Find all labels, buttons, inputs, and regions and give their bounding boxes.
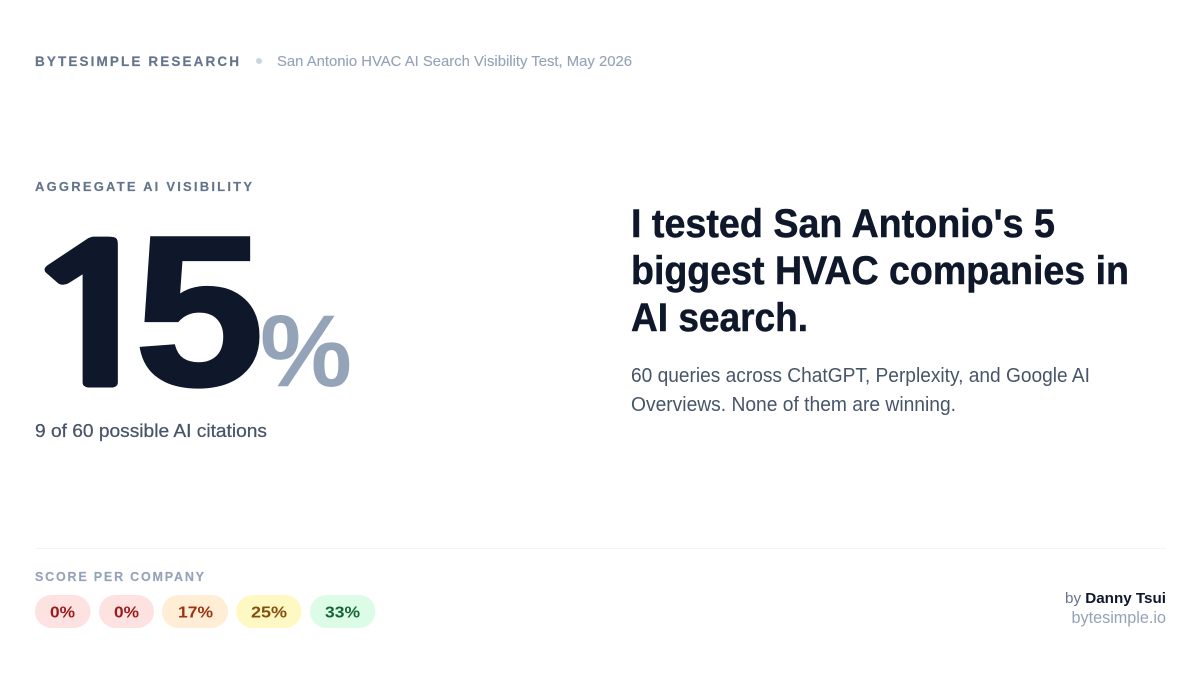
pill: 0% second xyxy=(99,595,154,628)
byline xyxy=(1065,590,1166,627)
pill: 25%: 25% xyxy=(251,604,287,622)
headline: biggest HVAC companies in xyxy=(631,249,1129,293)
description xyxy=(631,365,1090,416)
percent sign: % xyxy=(260,294,352,408)
big number xyxy=(14,191,264,431)
report subtitle: San Antonio HVAC AI Search Visibility Test, May 2026 xyxy=(277,54,632,70)
brand label: BYTESIMPLE RESEARCH xyxy=(35,54,239,69)
pill: 0% second: 0% xyxy=(114,604,139,622)
pill: 17%: 17% xyxy=(178,604,213,622)
header row xyxy=(35,54,632,70)
pill: 0% xyxy=(35,595,90,628)
description: 60 queries across ChatGPT, Perplexity, and Google AI xyxy=(631,365,1090,387)
panel: aggregate stat xyxy=(14,179,352,441)
site: bytesimple.io xyxy=(1072,609,1166,627)
big number: 1 xyxy=(14,224,175,414)
pill: 17% xyxy=(162,595,228,628)
headline: I tested San Antonio's 5 xyxy=(631,202,1055,246)
citations caption: 9 of 60 possible AI citations xyxy=(35,420,267,441)
pill: 0%: 0% xyxy=(50,604,75,622)
author: by Danny Tsui xyxy=(1065,590,1166,607)
headline xyxy=(631,202,1129,340)
section label: SCORE PER COMPANY xyxy=(35,570,205,584)
headline: AI search. xyxy=(631,296,808,340)
pill: 33% xyxy=(310,595,376,628)
panel: score per company xyxy=(35,570,376,628)
big number: 5 xyxy=(134,191,264,431)
separator dot xyxy=(256,58,262,64)
pill: 25% xyxy=(236,595,302,628)
stat label: AGGREGATE AI VISIBILITY xyxy=(35,179,252,194)
description: Overviews. None of them are winning. xyxy=(631,394,956,416)
pill: 33%: 33% xyxy=(325,604,360,622)
